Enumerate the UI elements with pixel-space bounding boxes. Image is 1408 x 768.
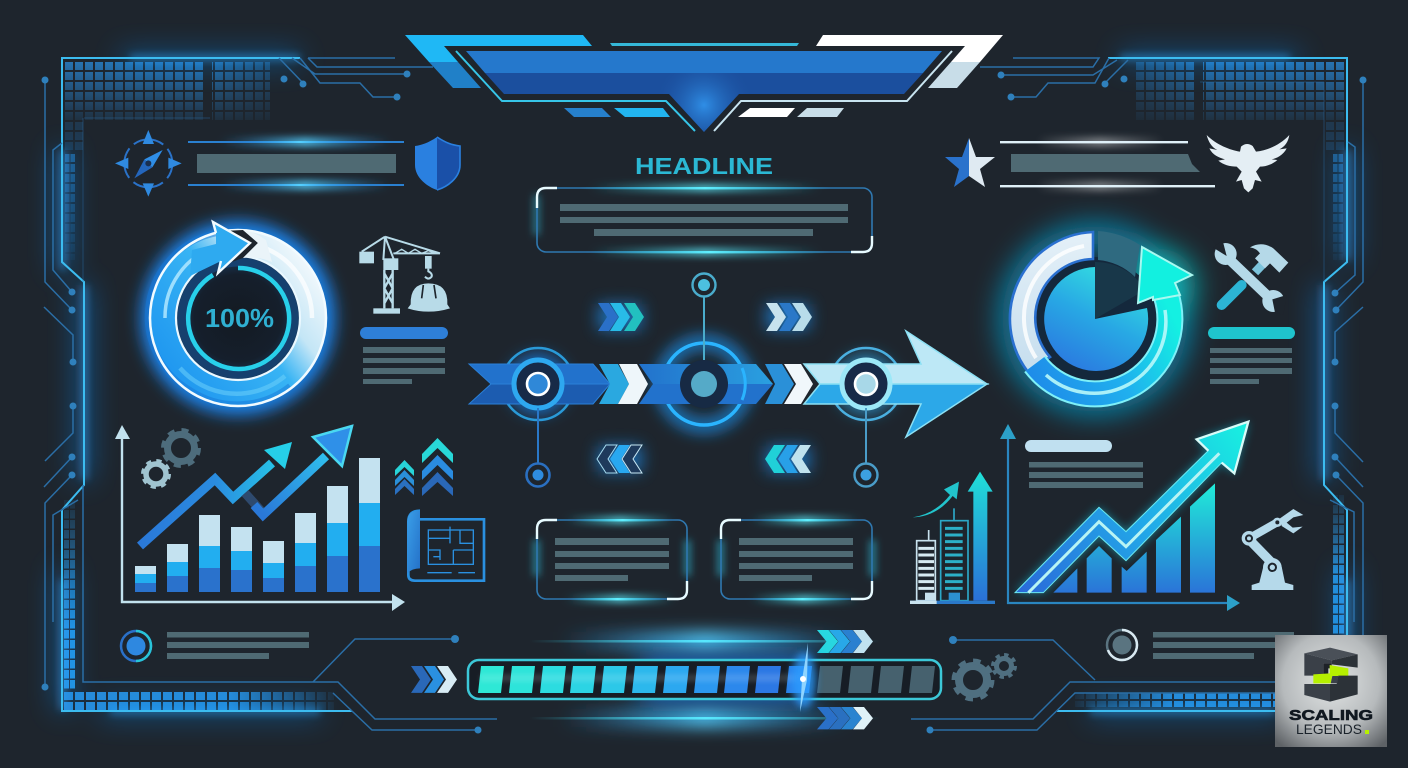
chevrons: before progress bar bbox=[411, 666, 457, 693]
icon: star bbox=[945, 138, 995, 187]
node outer rings bbox=[502, 343, 902, 425]
frame glow bbox=[58, 54, 1352, 715]
icon: upward chevrons bbox=[395, 438, 453, 496]
node three bbox=[842, 360, 890, 408]
bar flare bbox=[792, 643, 816, 712]
panel: headline text box bbox=[534, 185, 872, 255]
title banner bbox=[405, 35, 1003, 132]
logo wordmark: SCALING bbox=[1289, 708, 1373, 724]
ring glow bbox=[152, 232, 324, 404]
logo mark bbox=[1304, 648, 1358, 702]
trend arrow one bbox=[140, 442, 292, 546]
chart: pie with cycle arrow bbox=[1010, 231, 1196, 403]
arrow segment two bbox=[639, 364, 773, 404]
glowing rail: bottom bbox=[530, 709, 880, 727]
icon: wrench and hammer bbox=[1213, 241, 1288, 315]
icon: shield bbox=[415, 137, 460, 190]
arrow glow bbox=[1015, 422, 1248, 593]
text block: right pie caption bbox=[1208, 327, 1295, 384]
ring arrowhead bbox=[190, 222, 272, 276]
banner top bar bbox=[610, 43, 799, 46]
frame: left bbox=[62, 58, 352, 711]
final arrow bbox=[804, 331, 987, 437]
chevrons: top right bbox=[766, 303, 812, 331]
node two bbox=[680, 360, 728, 408]
pie sector bbox=[1044, 267, 1148, 371]
icon: gears bbox=[954, 655, 1015, 698]
header strip left bbox=[188, 138, 404, 189]
icon: city skyline with arrows bbox=[910, 472, 995, 604]
banner outline right bbox=[714, 51, 952, 131]
logo: Scaling Legends: LEGENDS bbox=[1296, 721, 1362, 737]
arrow glow bbox=[508, 342, 896, 426]
bar cells bbox=[478, 666, 935, 693]
trend arrow two bbox=[245, 426, 352, 515]
legend: left bbox=[121, 631, 309, 661]
circuit traces: bottom bbox=[83, 485, 1275, 734]
text block: left ring caption bbox=[360, 327, 448, 384]
panel: lower left text box bbox=[534, 517, 690, 602]
cyan cycle arc bbox=[1035, 247, 1192, 394]
panel: lower right text box bbox=[718, 517, 875, 602]
corner pixel grid: bottom left bbox=[64, 500, 334, 710]
center process arrow bbox=[469, 331, 987, 437]
connector: node two to top pin bbox=[692, 274, 716, 360]
banner left wing bbox=[405, 35, 592, 88]
chevrons: top left bbox=[598, 303, 644, 331]
progress bar bbox=[468, 643, 941, 712]
chevrons: rail top bbox=[817, 630, 873, 653]
chevrons: bottom left bbox=[597, 445, 642, 473]
circuit traces: left side bbox=[42, 76, 78, 690]
rising arrow bbox=[1015, 422, 1248, 593]
chart: left bar chart bbox=[115, 425, 405, 611]
gear large bbox=[164, 430, 198, 466]
circuit traces: right side bbox=[1330, 76, 1366, 635]
icon: blueprint bbox=[407, 511, 484, 581]
chart: 100% progress ring bbox=[148, 222, 326, 406]
chart: right growth chart bbox=[1000, 422, 1248, 611]
chevrons one bbox=[599, 364, 648, 404]
connector: node three to bottom pin bbox=[854, 408, 878, 486]
node center ring front arc bbox=[742, 368, 745, 400]
icon: compass bbox=[115, 130, 182, 197]
axes bbox=[1000, 424, 1240, 611]
header strip right bbox=[1000, 138, 1215, 190]
glowing rail: top bbox=[530, 632, 880, 650]
circuit traces: top left bbox=[83, 58, 433, 282]
logo: Scaling Legends bbox=[1275, 635, 1387, 747]
node one bbox=[514, 360, 562, 408]
ring value: 100% bbox=[205, 303, 274, 333]
icon: robot arm bbox=[1242, 509, 1303, 590]
chevrons: rail bottom bbox=[817, 707, 873, 729]
circuit traces: top right bbox=[980, 58, 1324, 282]
banner outline left bbox=[456, 51, 695, 131]
gear small bbox=[143, 461, 169, 487]
axes bbox=[115, 425, 405, 611]
corner pixel grid: top right bbox=[1136, 62, 1344, 260]
chevrons two bbox=[765, 364, 813, 404]
connector: node one to bottom pin bbox=[526, 408, 550, 486]
icon: eagle bbox=[1207, 135, 1289, 192]
bars bbox=[1053, 483, 1215, 593]
corner pixel grid: bottom right bbox=[1075, 495, 1345, 709]
pie glow bbox=[1011, 235, 1196, 403]
pale arc bbox=[1010, 232, 1093, 372]
bars bbox=[135, 458, 380, 592]
arrow segment one bbox=[469, 364, 610, 404]
banner main panel bbox=[466, 51, 942, 132]
text block: right chart caption bbox=[1025, 440, 1143, 488]
banner lower tabs bbox=[564, 108, 844, 117]
banner right wing bbox=[816, 35, 1003, 88]
icon: tower crane and helmet bbox=[359, 237, 450, 314]
frame: right bbox=[1057, 58, 1347, 711]
dark teal segment bbox=[1095, 231, 1145, 319]
chevrons: bottom right bbox=[765, 445, 811, 473]
corner pixel grid: top left bbox=[65, 62, 270, 260]
bar glow bbox=[640, 660, 810, 698]
legend: right bbox=[1107, 630, 1294, 660]
ring band shading bbox=[148, 233, 312, 404]
heading: HEADLINE bbox=[635, 153, 773, 179]
